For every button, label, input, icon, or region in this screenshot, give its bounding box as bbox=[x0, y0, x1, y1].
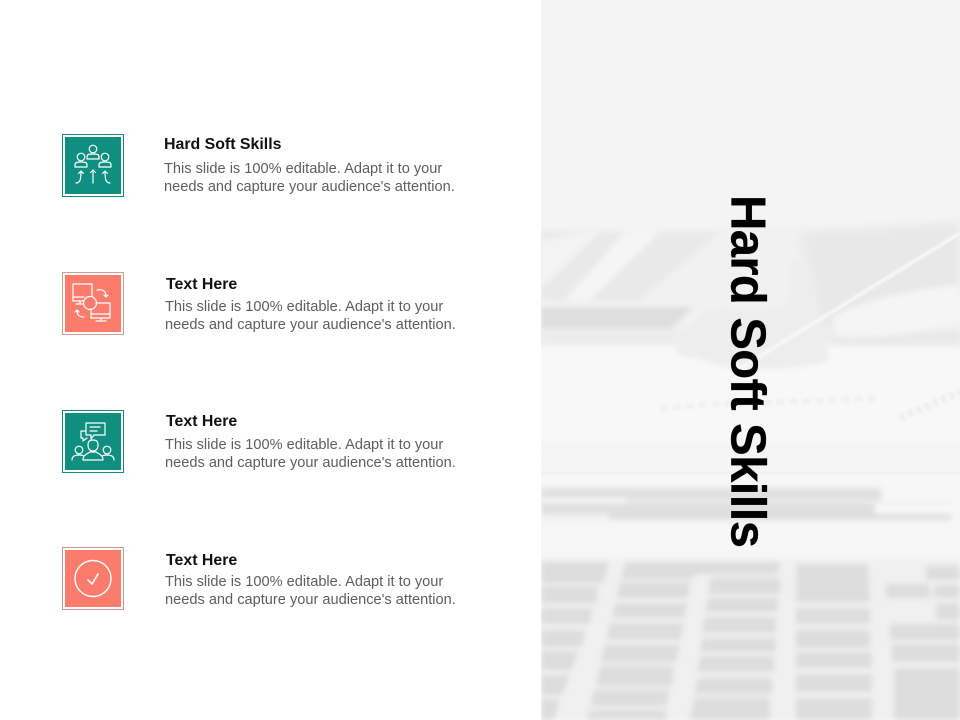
heading: Hard Soft Skills bbox=[164, 136, 281, 153]
icon: two monitors with exchange arrows bbox=[62, 272, 124, 335]
text block: This slide is 100% editable. Adapt it to your bbox=[165, 574, 443, 590]
text block bbox=[165, 299, 456, 333]
text block: This slide is 100% editable. Adapt it to your bbox=[164, 161, 442, 177]
text block bbox=[165, 574, 456, 608]
text block: needs and capture your audience's attention. bbox=[165, 455, 456, 471]
title: vertical Hard Soft Skills: Hard Soft Skills bbox=[720, 195, 774, 548]
item 3: Text Here bbox=[62, 410, 456, 473]
text block: needs and capture your audience's attention. bbox=[164, 179, 455, 195]
item 1: Hard Soft Skills bbox=[62, 134, 455, 197]
text block: This slide is 100% editable. Adapt it to your bbox=[165, 299, 443, 315]
icon: team with speech bubbles bbox=[62, 410, 124, 473]
text block: needs and capture your audience's attention. bbox=[165, 592, 456, 608]
text block: This slide is 100% editable. Adapt it to your bbox=[165, 437, 443, 453]
item 2: Text Here bbox=[62, 272, 456, 335]
heading: Text Here bbox=[166, 276, 237, 293]
panel: background photo of laptop and hand with pen bbox=[541, 0, 960, 720]
icon: circled check mark bbox=[62, 547, 124, 610]
text block: needs and capture your audience's attention. bbox=[165, 317, 456, 333]
heading: Text Here bbox=[166, 413, 237, 430]
item 4: Text Here bbox=[62, 547, 456, 610]
icon: people with upward arrows bbox=[62, 134, 124, 197]
heading: Text Here bbox=[166, 552, 237, 569]
text block bbox=[164, 161, 455, 195]
text block bbox=[165, 437, 456, 471]
